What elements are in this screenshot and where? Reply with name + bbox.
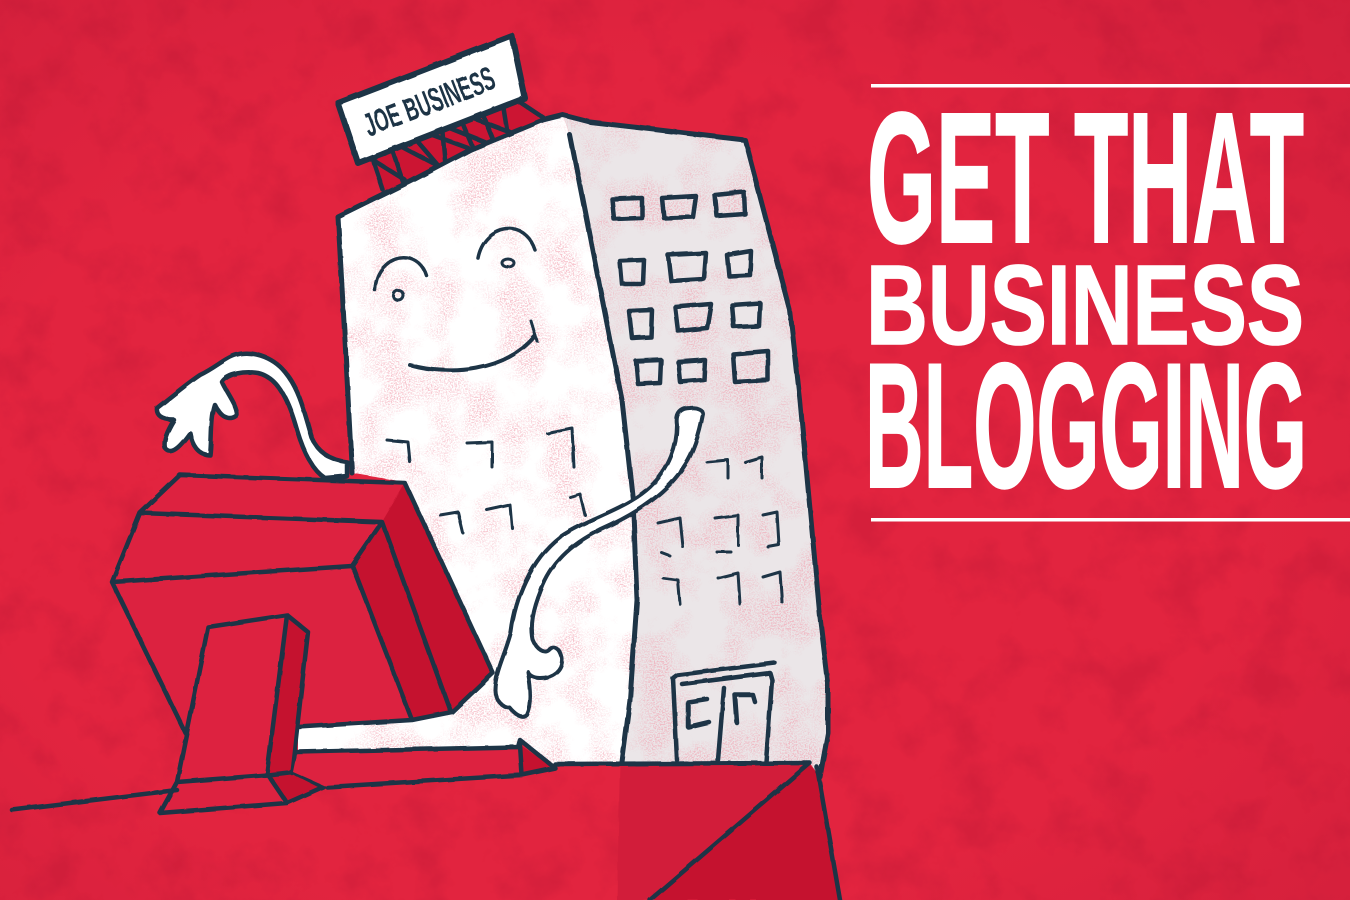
building front face [298, 115, 637, 765]
monitor [112, 475, 493, 738]
right arm and hand [495, 408, 703, 717]
building outline [338, 115, 828, 777]
rooftop sign [338, 36, 525, 163]
sign label: JOE BUSINESS [358, 60, 500, 144]
title block [865, 75, 1350, 525]
building right side face [563, 115, 828, 777]
door [673, 663, 775, 762]
illustration: building character at a computer [12, 36, 840, 900]
building wall texture [330, 110, 840, 790]
right face windows [612, 192, 768, 384]
face [375, 229, 537, 370]
rooftop sign truss [373, 100, 547, 192]
left arm and hand [157, 353, 347, 478]
monitor stand [160, 615, 323, 813]
faded windows [387, 428, 782, 604]
keyboard and desk [12, 740, 840, 900]
